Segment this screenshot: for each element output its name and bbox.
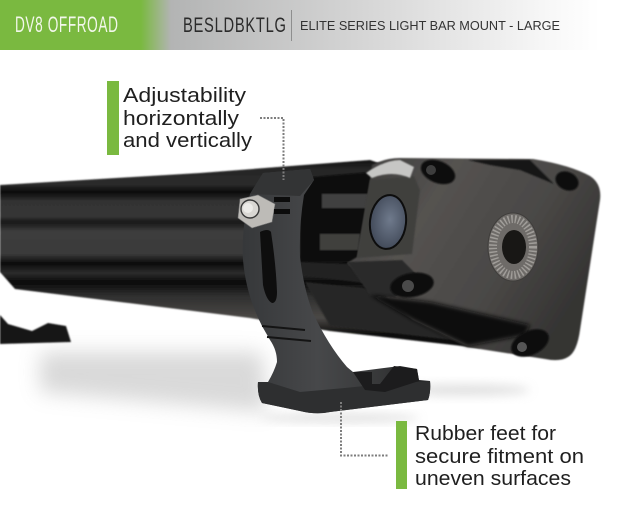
lower screw recess <box>388 269 436 301</box>
green accent bar <box>396 421 407 489</box>
part number: BESLDBKTLG <box>183 13 286 37</box>
lower dark sweep <box>370 295 530 346</box>
arrow: dotted leader to bracket top <box>260 118 284 180</box>
callout text: Rubber feet for <box>415 423 556 445</box>
lens housing <box>357 176 420 258</box>
bolt and nut <box>238 195 290 228</box>
brand name: DV8 OFFROAD <box>15 12 118 37</box>
foot base <box>258 381 430 413</box>
mounting bracket <box>238 169 430 413</box>
lens <box>367 193 409 251</box>
top right channel <box>468 160 554 184</box>
upper screw recess <box>417 155 459 189</box>
callout: rubber feet <box>396 421 590 490</box>
serrated washer <box>488 213 538 281</box>
threaded hole <box>502 230 526 264</box>
light bar body <box>0 160 480 348</box>
green accent bar <box>107 81 119 155</box>
bottom screw recess <box>507 324 553 362</box>
callout text: horizontally <box>123 108 239 130</box>
product title: ELITE SERIES LIGHT BAR MOUNT - LARGE <box>300 18 560 33</box>
rib lines <box>262 326 311 341</box>
callout: adjustability <box>107 81 252 155</box>
bar fins between bracket and end cap <box>300 172 470 342</box>
callout text: Adjustability <box>123 85 246 107</box>
callout text: uneven surfaces <box>415 468 571 490</box>
bracket top cap <box>250 169 314 196</box>
ground shadows <box>40 352 530 422</box>
icon: blurred distant mount foot <box>0 315 71 344</box>
rubber pad <box>353 366 419 392</box>
lower lip <box>347 260 420 297</box>
slot <box>260 230 277 303</box>
right screw recess <box>552 168 582 194</box>
end cap <box>347 155 600 362</box>
callout text: secure fitment on <box>415 446 584 468</box>
arrow: dotted leader to foot <box>341 402 389 456</box>
header band <box>0 0 600 50</box>
callout text: and vertically <box>123 130 252 152</box>
top highlight <box>366 160 414 178</box>
